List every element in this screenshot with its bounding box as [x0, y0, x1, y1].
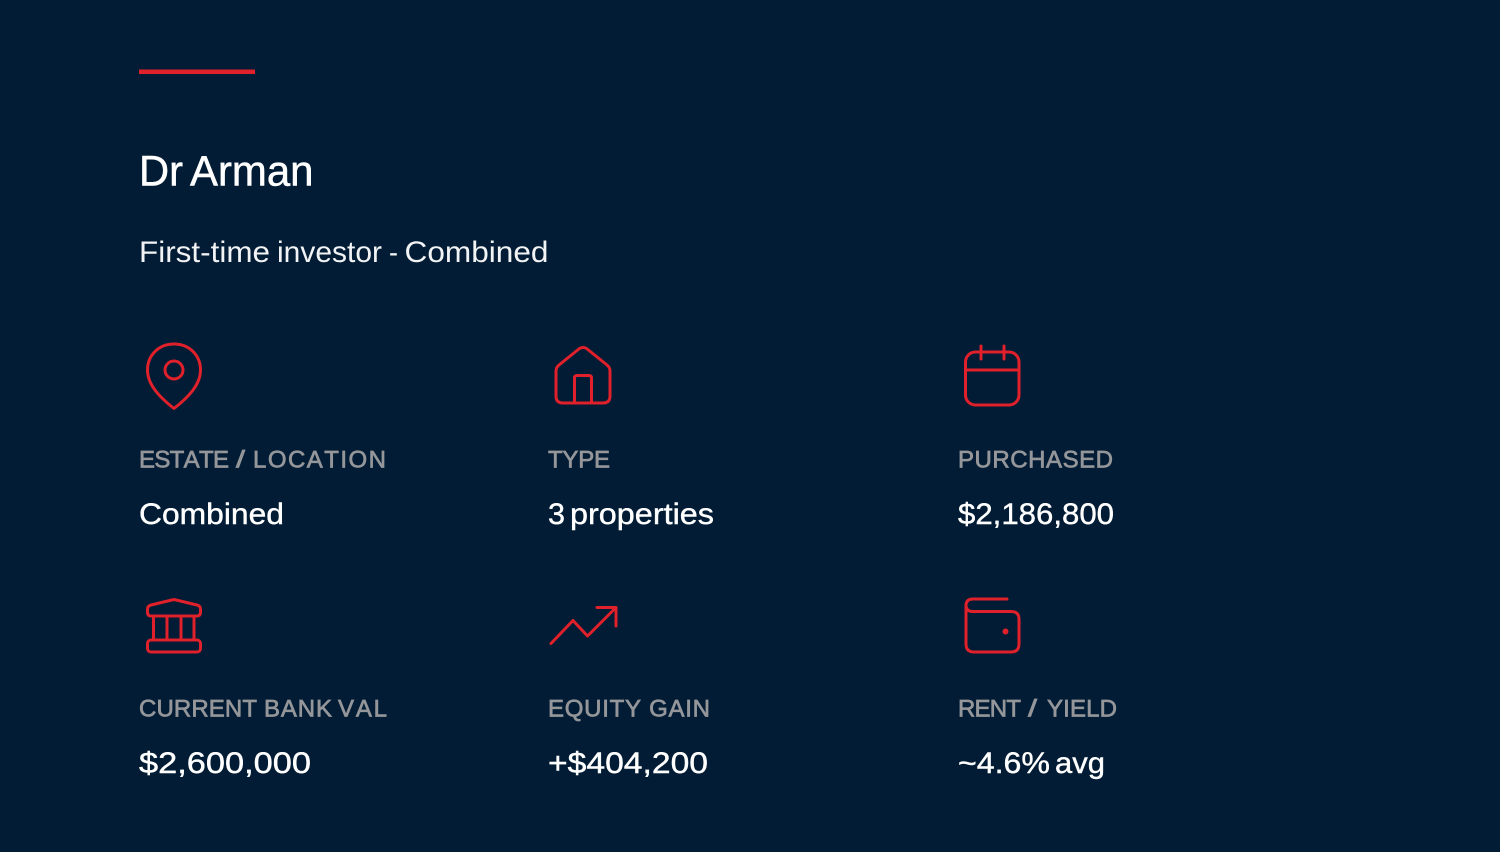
value: yield: ~4.6%: [958, 747, 1050, 780]
label: current bank val: VAL: [338, 696, 387, 722]
label: type: TYPE: [548, 446, 610, 474]
icon: wallet: [966, 599, 1019, 652]
accent bar: [139, 70, 255, 74]
icon: map pin: [148, 344, 200, 408]
label: estate / location: /: [236, 446, 245, 474]
label: equity gain: EQUITY GAIN: [548, 696, 710, 722]
label: current bank val: [139, 696, 387, 722]
stat: purchased: [958, 346, 1114, 531]
label: rent / yield: YIELD: [1047, 696, 1117, 722]
label: rent / yield: RENT: [958, 696, 1021, 722]
subtitle: investor: [277, 236, 382, 269]
subtitle: First-time: [139, 236, 270, 269]
subtitle: [139, 236, 548, 269]
title: Dr: [139, 148, 183, 196]
value: equity amount: +$404,200: [548, 747, 708, 780]
icon: trending up arrow: [551, 608, 616, 644]
value: 3 properties: properties: [570, 498, 714, 531]
label: rent / yield: [958, 696, 1117, 722]
stat: estate / location: [139, 344, 386, 531]
subtitle: -: [389, 236, 398, 269]
value: yield: [958, 747, 1105, 780]
stat: equity gain: [548, 608, 710, 780]
label: current bank val: BANK: [264, 696, 332, 722]
title: Arman: [190, 148, 314, 196]
value: current bank amount: $2,600,000: [139, 747, 311, 780]
value: 3 properties: 3: [548, 498, 565, 531]
stat: type: [548, 348, 714, 531]
icon: bank: [148, 600, 200, 652]
value: combined: Combined: [139, 498, 284, 531]
value: purchased amount: $2,186,800: [958, 498, 1114, 531]
label: estate / location: LOCATION: [253, 446, 386, 474]
label: rent / yield: /: [1028, 696, 1037, 722]
label: estate / location: [139, 446, 386, 474]
label: current bank val: CURRENT: [139, 696, 257, 722]
icon: calendar: [966, 346, 1019, 405]
label: purchased: PURCHASED: [958, 446, 1113, 474]
stat: rent / yield: [958, 599, 1117, 780]
value: yield: avg: [1055, 747, 1105, 780]
label: estate / location: ESTATE: [139, 446, 229, 474]
icon: house: [556, 348, 610, 403]
subtitle: Combined: [404, 236, 548, 269]
title: [139, 148, 314, 196]
stat: current bank val: [139, 600, 387, 780]
